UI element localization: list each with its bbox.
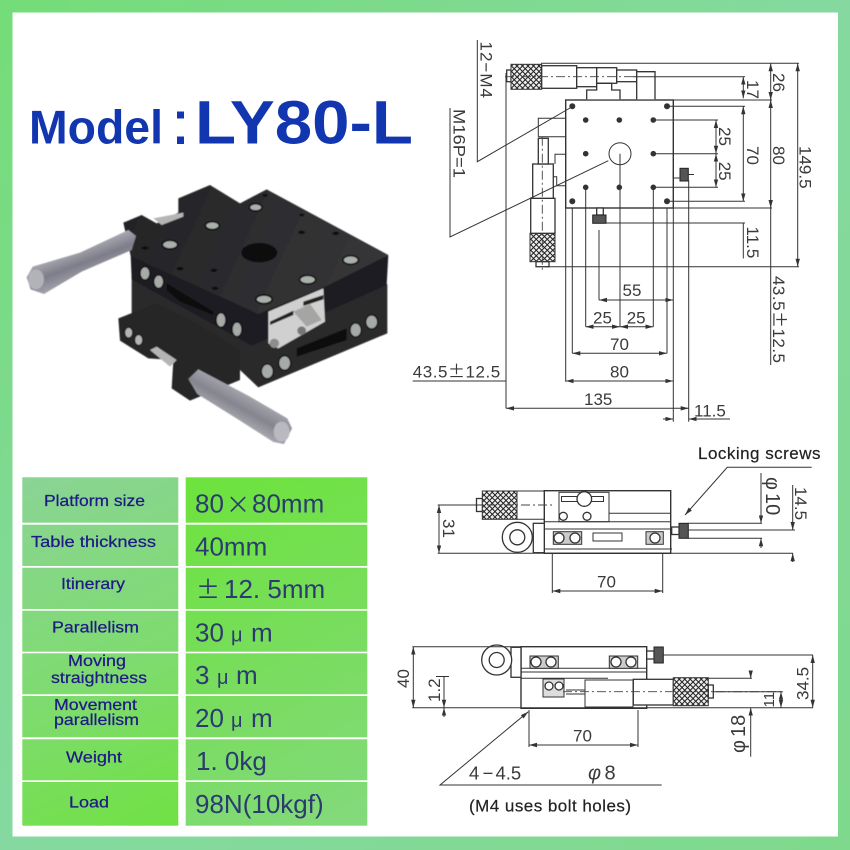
top plate surface bbox=[123, 185, 388, 314]
table values: 3 bbox=[195, 660, 209, 690]
dimension numbers: 17 bbox=[743, 80, 762, 99]
dimension numbers: 25 bbox=[715, 162, 734, 181]
side view 1 micrometer and knob bbox=[470, 491, 555, 553]
lower stage body bbox=[132, 277, 387, 387]
silver lock plate bbox=[268, 288, 325, 348]
table labels: Movement bbox=[54, 697, 138, 714]
rear bracket bbox=[153, 213, 183, 225]
callout: mounting holes: (M4 uses bolt holes) bbox=[469, 796, 631, 816]
lock screws bbox=[593, 168, 694, 223]
table values: μ bbox=[231, 710, 243, 732]
dimension numbers: 43.5 ± 12.5 bbox=[768, 276, 793, 363]
callout: mounting holes bbox=[440, 712, 662, 816]
table values: 80 bbox=[195, 488, 224, 518]
side view 2 dimensions: 1.2 bbox=[425, 678, 444, 702]
dimension numbers: 11.5 bbox=[743, 226, 762, 258]
table values: 98N(10kgf) bbox=[195, 789, 324, 819]
table labels: parallelism bbox=[54, 712, 139, 729]
leader: M16P=1 bbox=[449, 108, 608, 237]
table values: 80mm bbox=[252, 488, 324, 518]
slot details bbox=[167, 283, 347, 357]
table labels bbox=[31, 493, 156, 812]
drawing: side view 1 bbox=[438, 444, 820, 593]
callout: mounting holes: − bbox=[482, 762, 493, 783]
table labels: straightness bbox=[51, 670, 147, 687]
callout: mounting holes: 8 bbox=[604, 762, 616, 784]
table values: μ bbox=[217, 667, 229, 689]
dimension numbers: 25 bbox=[593, 308, 612, 327]
centre hole bbox=[241, 243, 277, 262]
title bbox=[29, 88, 413, 156]
table labels: Weight bbox=[66, 750, 123, 766]
side view 1 dimensions: φ bbox=[761, 477, 783, 490]
table values: m bbox=[251, 618, 273, 648]
side view 2 dimensions: 18 bbox=[728, 715, 750, 737]
front bracket block bbox=[118, 303, 240, 401]
table values: 30 bbox=[195, 618, 224, 648]
side view 1 dimensions: 70 bbox=[597, 572, 616, 591]
top plate small holes bbox=[142, 194, 339, 290]
table values bbox=[195, 485, 325, 819]
side view 1 dimensions bbox=[438, 473, 810, 593]
dimension numbers: 43.5±12.5 bbox=[413, 357, 500, 382]
top plate side faces bbox=[131, 255, 388, 346]
side view 2 dimensions: 34.5 bbox=[794, 667, 812, 700]
table labels: Moving bbox=[68, 653, 126, 670]
dimension numbers: 25 bbox=[715, 127, 734, 146]
top micrometer bbox=[505, 64, 655, 99]
leader: 12-M4 bbox=[476, 40, 570, 162]
callout: mounting holes: φ bbox=[588, 762, 601, 784]
dimension numbers: 149.5 bbox=[796, 146, 814, 189]
callout: mounting holes: 4.5 bbox=[496, 762, 521, 783]
dimension lines bbox=[413, 63, 799, 422]
dimension numbers: 25 bbox=[627, 308, 646, 327]
table labels: Table thickness bbox=[31, 534, 156, 551]
side view 2 dimensions: 70 bbox=[573, 727, 592, 746]
side view 1 dimensions: 10 bbox=[761, 493, 783, 515]
dimension numbers: 26 bbox=[769, 73, 788, 92]
title: LY80-L bbox=[195, 88, 413, 156]
leader: 12-M4: 12−M4 bbox=[476, 42, 496, 98]
side view 1 body bbox=[544, 491, 672, 553]
side view 2 micrometer and knob bbox=[482, 645, 781, 706]
table values: 12. 5mm bbox=[224, 574, 325, 604]
side view 2 dimensions: 40 bbox=[394, 669, 413, 688]
table labels: Parallelism bbox=[52, 620, 139, 636]
drawing: top view bbox=[413, 40, 814, 422]
left micrometer bbox=[530, 118, 566, 272]
callout: mounting holes: 4 bbox=[469, 762, 479, 783]
table values: 40mm bbox=[195, 532, 267, 562]
table cell backgrounds bbox=[22, 477, 367, 826]
side view 1 dimensions: 14.5 bbox=[791, 487, 810, 520]
side view 2 dimensions: φ bbox=[728, 740, 750, 753]
table labels: Itinerary bbox=[61, 576, 125, 593]
table values: 20 bbox=[195, 703, 224, 733]
callout: locking screws bbox=[685, 444, 820, 515]
micrometer: left bbox=[27, 230, 136, 294]
dimension numbers: 80 bbox=[769, 146, 788, 165]
micrometer: front bbox=[188, 369, 292, 444]
side view 2 dimensions bbox=[394, 647, 813, 757]
dimension numbers: 70 bbox=[610, 335, 629, 354]
dimension numbers: 70 bbox=[743, 146, 762, 165]
dimension numbers bbox=[413, 73, 814, 421]
stage plate with holes bbox=[566, 100, 673, 208]
side view 2 dimensions: 11 bbox=[761, 692, 778, 708]
table labels: Platform size bbox=[44, 493, 145, 510]
dimension numbers: 135 bbox=[584, 390, 612, 409]
title: Model bbox=[29, 100, 163, 154]
table values: μ bbox=[231, 624, 243, 646]
side view 2 body bbox=[521, 647, 647, 708]
table values: m bbox=[251, 703, 273, 733]
table values: m bbox=[236, 660, 258, 690]
side view 1 dimensions: 31 bbox=[439, 519, 458, 538]
table values: × bbox=[226, 485, 250, 520]
product photo: XY stage with micrometers bbox=[27, 185, 388, 444]
top plate screws bbox=[162, 204, 358, 304]
dimension numbers: 80 bbox=[610, 362, 629, 381]
specification table bbox=[22, 477, 367, 826]
callout: locking screws: Locking screws bbox=[698, 444, 820, 463]
leader: M16P=1: M16P=1 bbox=[449, 109, 468, 178]
dimension numbers: 55 bbox=[622, 281, 641, 300]
table labels: Load bbox=[69, 794, 109, 812]
table values: 1. 0kg bbox=[196, 746, 267, 776]
table values: ± bbox=[196, 570, 220, 605]
side view 2 locking screw bbox=[647, 647, 663, 663]
side view 1 locking screw bbox=[672, 523, 688, 538]
drawing: side view 2 bbox=[394, 645, 813, 816]
dimension numbers: 11.5 bbox=[694, 402, 726, 421]
side screws bbox=[140, 267, 378, 379]
